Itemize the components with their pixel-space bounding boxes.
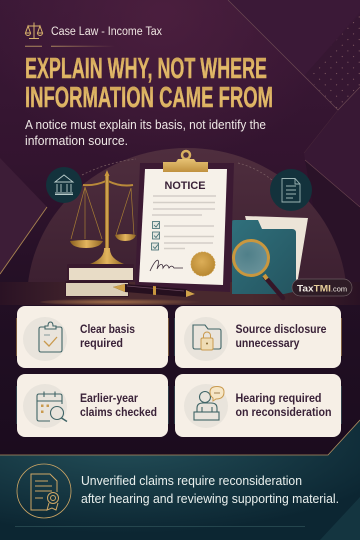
subtitle: information source. xyxy=(25,134,128,148)
label xyxy=(80,322,135,350)
decorative background panels xyxy=(0,0,360,300)
header: category label xyxy=(26,22,162,38)
clipboard xyxy=(135,151,234,292)
icon: speaker at podium xyxy=(184,384,228,428)
scales xyxy=(70,170,136,264)
icon: courthouse badge xyxy=(46,167,82,203)
subtitle: A notice must explain its basis, not identify the xyxy=(25,118,266,132)
title xyxy=(25,53,273,114)
TaxTMI logo badge: TaxTMI.com xyxy=(297,284,347,294)
illustration: notice on a desk xyxy=(0,148,360,306)
label: claims checked xyxy=(80,405,157,419)
takeaway text: after hearing and reviewing supporting material. xyxy=(81,492,339,506)
label xyxy=(236,391,332,419)
clip xyxy=(163,151,208,172)
folder with papers xyxy=(232,216,308,294)
label: Earlier-year xyxy=(80,391,138,405)
icon: locked folder xyxy=(184,317,228,361)
icon: scales small xyxy=(26,22,42,38)
dashed connector arcs xyxy=(82,159,272,180)
checkboxes xyxy=(152,222,160,250)
pen xyxy=(113,284,195,297)
subtitle xyxy=(25,118,266,148)
category text: Case Law - Income Tax xyxy=(51,26,162,38)
signature xyxy=(150,260,183,271)
paper xyxy=(139,169,227,285)
takeaway text: Unverified claims require reconsideration xyxy=(81,474,302,488)
icon: calendar with magnifier xyxy=(23,384,67,428)
label xyxy=(236,322,327,350)
bottom band xyxy=(0,420,360,540)
card: earlier-year claims xyxy=(16,374,168,437)
NOTICE label: NOTICE xyxy=(164,180,206,192)
header rule xyxy=(25,45,115,48)
TaxTMI logo badge xyxy=(292,279,352,296)
icon: document badge xyxy=(270,169,312,211)
body lines xyxy=(152,196,216,248)
card: source disclosure xyxy=(174,306,342,368)
books xyxy=(65,264,134,297)
label xyxy=(80,391,157,419)
dome backdrop xyxy=(27,148,347,304)
label: required xyxy=(80,336,123,350)
magnifier xyxy=(234,240,283,298)
label: Clear basis xyxy=(80,322,135,336)
card: clear basis xyxy=(16,306,168,368)
icon: clipboard check xyxy=(23,317,67,361)
card: hearing required xyxy=(174,374,342,437)
label: unnecessary xyxy=(236,336,300,350)
takeaway text xyxy=(81,474,339,506)
label: Hearing required xyxy=(236,391,322,405)
gold seal xyxy=(191,252,215,276)
label: Source disclosure xyxy=(236,322,327,336)
icon: certificate xyxy=(17,464,71,518)
label: on reconsideration xyxy=(236,405,332,419)
desk xyxy=(0,282,360,305)
